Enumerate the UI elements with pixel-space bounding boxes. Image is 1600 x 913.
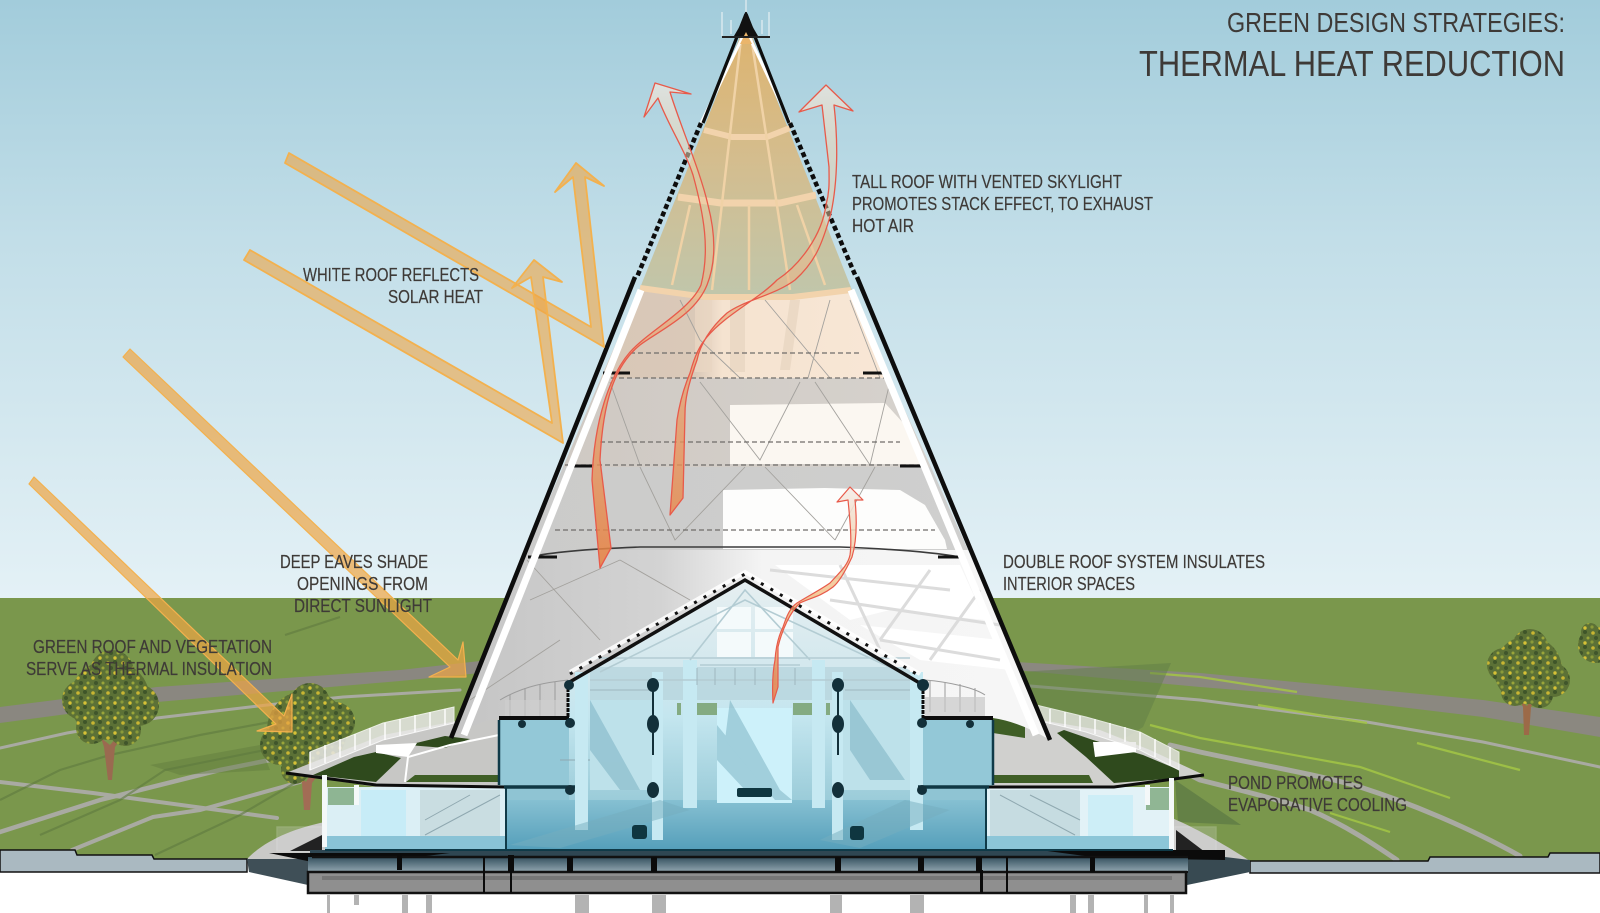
label: deep eaves: OPENINGS FROM — [297, 573, 428, 594]
floor plenum band — [310, 850, 1190, 858]
label: deep eaves: DEEP EAVES SHADE — [280, 551, 428, 572]
basement band — [308, 857, 1188, 872]
ground shadows — [1018, 663, 1171, 738]
right road — [1015, 662, 1600, 737]
left road — [0, 661, 480, 723]
balconies under eaves — [500, 680, 985, 717]
gable roof line — [568, 572, 923, 685]
arrow: solar ray to deep eaves — [123, 349, 466, 677]
white truss bands right of gable — [775, 565, 1010, 670]
tree 4 — [1578, 623, 1600, 663]
tree 1 — [62, 650, 159, 780]
perimeter columns — [322, 775, 1174, 850]
label: white roof: WHITE ROOF REFLECTS — [303, 264, 479, 285]
label: double roof — [1003, 551, 1265, 594]
label: pond: POND PROMOTES — [1228, 772, 1363, 793]
arrow: hot air stream left — [592, 83, 714, 568]
terrace left — [286, 707, 499, 787]
hall interior details — [510, 590, 950, 848]
label: double roof: DOUBLE ROOF SYSTEM INSULATES — [1003, 551, 1265, 572]
terrain slopes beside the building — [247, 822, 325, 859]
roof section middle — [563, 378, 931, 467]
foundation piles — [327, 895, 1174, 913]
label: white roof — [303, 264, 483, 307]
trees — [62, 623, 1600, 810]
grey truss shading right of gable — [770, 565, 1000, 660]
label: tall roof — [852, 171, 1153, 236]
outer roof shell — [451, 14, 1050, 740]
skylight ribs — [672, 30, 825, 290]
gable glass interior — [568, 580, 923, 800]
roof section upper — [601, 288, 890, 378]
label: green roof — [26, 636, 272, 679]
arrow: solar ray to vegetation — [29, 477, 292, 732]
roof trusses — [470, 300, 890, 700]
right wedge — [1175, 857, 1250, 885]
label: double roof: INTERIOR SPACES — [1003, 573, 1135, 594]
bench — [737, 788, 772, 797]
foundation and ground strip — [0, 850, 1600, 913]
ground: green landscape with paths — [0, 598, 1600, 861]
ground strip left — [0, 850, 247, 872]
label: deep eaves: DIRECT SUNLIGHT — [294, 595, 432, 616]
roof section lower — [527, 467, 968, 550]
sky background — [0, 0, 1600, 600]
tree 3 — [1487, 629, 1570, 735]
arrow: solar ray reflected from upper roof — [285, 153, 604, 347]
chairs — [632, 825, 647, 839]
label: pond: EVAPORATIVE COOLING — [1228, 794, 1407, 815]
label: green roof: GREEN ROOF AND VEGETATION — [33, 636, 272, 657]
label: white roof: SOLAR HEAT — [388, 286, 483, 307]
label: tall roof: HOT AIR — [852, 215, 914, 236]
label: tall roof: PROMOTES STACK EFFECT, TO EXHAUST — [852, 193, 1153, 214]
structural frame — [286, 683, 1204, 850]
ground strip right — [1250, 853, 1600, 873]
label: pond — [1228, 772, 1407, 815]
arrow: solar ray reflected from lower roof — [244, 250, 563, 443]
terrace-side lower rooms — [325, 718, 1173, 850]
arrow: hot air stream right — [670, 85, 853, 515]
skylight — [640, 22, 852, 297]
label: green roof: SERVE AS THERMAL INSULATION — [26, 658, 272, 679]
main hall floor — [506, 800, 986, 850]
stair railings — [277, 827, 1216, 853]
floor rings — [555, 353, 935, 530]
title — [1139, 7, 1565, 84]
label: deep eaves — [280, 551, 432, 616]
tree 2 — [260, 683, 355, 810]
skylight panes — [717, 607, 793, 657]
roof finial — [722, 0, 770, 44]
arrow: hot air stream from hall — [773, 487, 863, 703]
skylight ring beams — [640, 128, 851, 297]
lower slab — [308, 872, 1186, 893]
label: tall roof: TALL ROOF WITH VENTED SKYLIGHT — [852, 171, 1122, 192]
terrace right — [987, 705, 1204, 787]
left wedge — [247, 859, 330, 885]
